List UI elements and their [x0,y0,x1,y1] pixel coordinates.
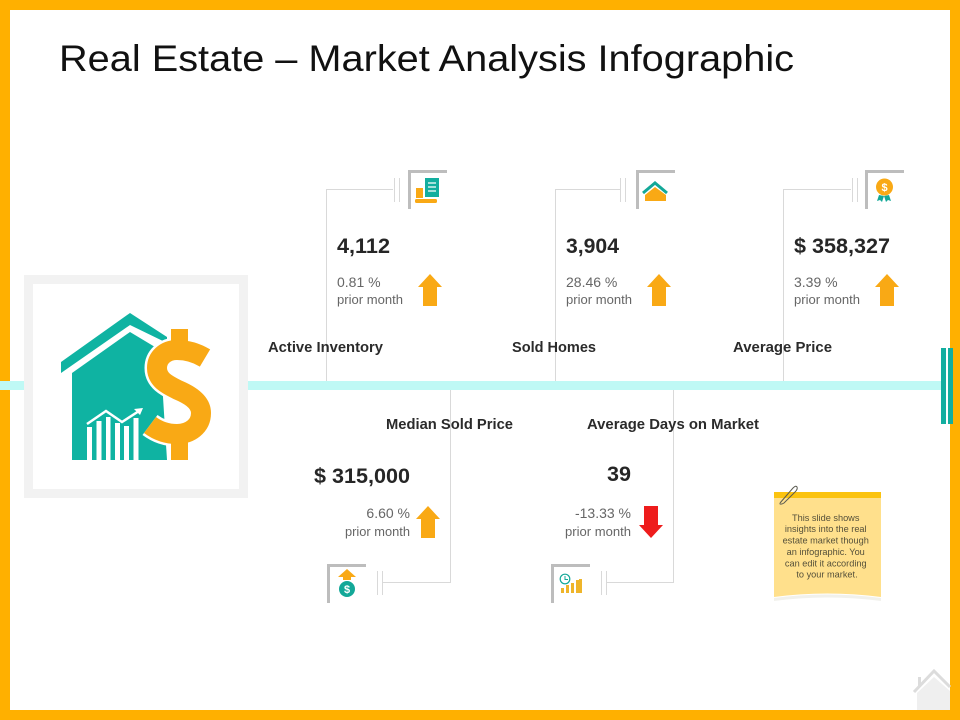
change: 28.46 % [566,274,617,290]
heading: active inventory: Active Inventory [268,340,383,356]
comparison: prior month [794,292,860,307]
comparison: prior month [566,292,632,307]
panel: average days on market [552,390,759,603]
value: $ 358,327 [794,235,890,258]
note text: estate market though [783,536,869,546]
icon: house with dollar [61,313,205,460]
icon: price up: $ [344,584,350,596]
change: 3.39 % [794,274,838,290]
icon: house [638,172,675,209]
value: 4,112 [337,235,390,258]
change: 6.60 % [366,505,410,521]
icon: up arrow [875,274,899,306]
icon: corner home [914,671,950,710]
note text: an infographic. You [787,547,865,557]
change: -13.33 % [575,505,631,521]
callout: sticky note [774,486,881,601]
panel: median sold price [314,390,513,603]
icon: up arrow [418,274,442,306]
panel: average price [733,172,904,381]
icon: up arrow [647,274,671,306]
icon: price medal: $ [881,182,888,194]
heading: sold homes: Sold Homes [512,340,596,356]
comparison: prior month [337,292,403,307]
icon: down arrow [639,506,663,538]
value: 39 [607,463,631,486]
note text: insights into the real [785,524,867,534]
note text: This slide shows [792,513,860,523]
comparison: prior month [345,524,410,539]
icon: price medal [866,172,904,209]
note text: to your market. [796,570,858,580]
panel: active inventory [268,172,447,381]
icon: inventory checklist [410,172,447,209]
icon: price up [328,566,366,603]
icon: clock and bars [552,566,590,603]
icon: up arrow [416,506,440,538]
timeline bar [0,348,953,424]
value: $ 315,000 [314,465,410,488]
main icon panel [28,280,244,494]
icon: paper clip [780,486,797,504]
heading: average days on market: Average Days on Market [587,417,759,433]
heading: average price: Average Price [733,340,832,356]
note text: can edit it according [785,558,867,568]
value: 3,904 [566,235,619,258]
comparison: prior month [565,524,631,539]
panel: sold homes [512,172,675,381]
change: 0.81 % [337,274,381,290]
heading: median sold price: Median Sold Price [386,417,513,433]
title: Real Estate – Market Analysis Infographic [59,38,794,79]
